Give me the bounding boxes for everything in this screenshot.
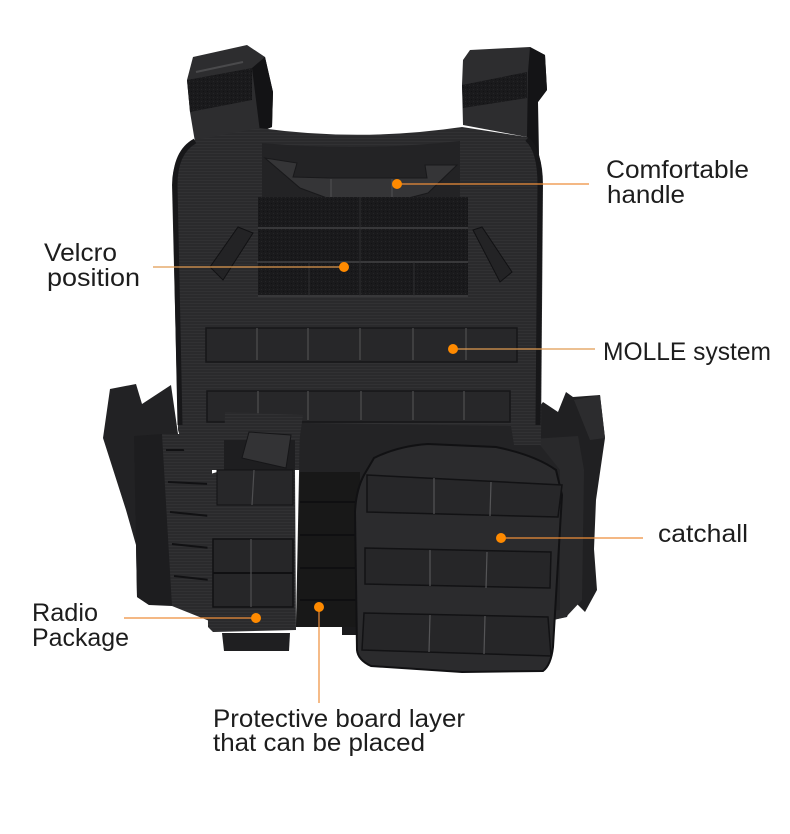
callout: comfortable handle — [392, 156, 749, 209]
left buckle strap — [210, 227, 253, 280]
radio pouch bottom tab — [222, 633, 290, 651]
radio pouch — [207, 412, 303, 651]
callout: velcro position: Velcro — [44, 239, 117, 267]
callout: protective board layer: that can be placed — [213, 729, 425, 757]
callout: radio package — [32, 599, 261, 652]
right shoulder strap — [462, 47, 547, 155]
right buckle strap — [473, 227, 512, 282]
main plate body — [172, 127, 543, 470]
MOLLE webbing row 2 — [207, 391, 510, 422]
callout: MOLLE system — [448, 338, 771, 366]
grab handle — [265, 158, 457, 202]
callout: comfortable handle: Comfortable — [606, 156, 749, 184]
shadowed neck recess — [262, 141, 460, 198]
lower body panel — [296, 423, 560, 635]
callout: velcro position: position — [47, 264, 140, 292]
callout: catchall — [496, 520, 748, 548]
left side wing — [103, 384, 212, 622]
right side wing — [513, 392, 605, 625]
callout: comfortable handle: handle — [607, 181, 685, 209]
callout: protective board layer: Protective board layer — [213, 705, 465, 733]
MOLLE webbing row 1 — [206, 328, 517, 362]
callout: velcro position — [44, 239, 349, 292]
left shoulder strap — [187, 45, 273, 142]
callout: protective board layer — [213, 602, 465, 757]
catchall pouch — [355, 444, 562, 672]
body edge binding — [175, 139, 540, 425]
callout: radio package: Package — [32, 624, 129, 652]
callout: MOLLE system: MOLLE system — [603, 338, 771, 366]
velcro panel — [257, 197, 468, 297]
radio strap tab — [242, 432, 291, 468]
vest illustration — [103, 45, 605, 672]
callout: radio package: Radio — [32, 599, 98, 627]
callout: catchall: catchall — [658, 520, 748, 548]
